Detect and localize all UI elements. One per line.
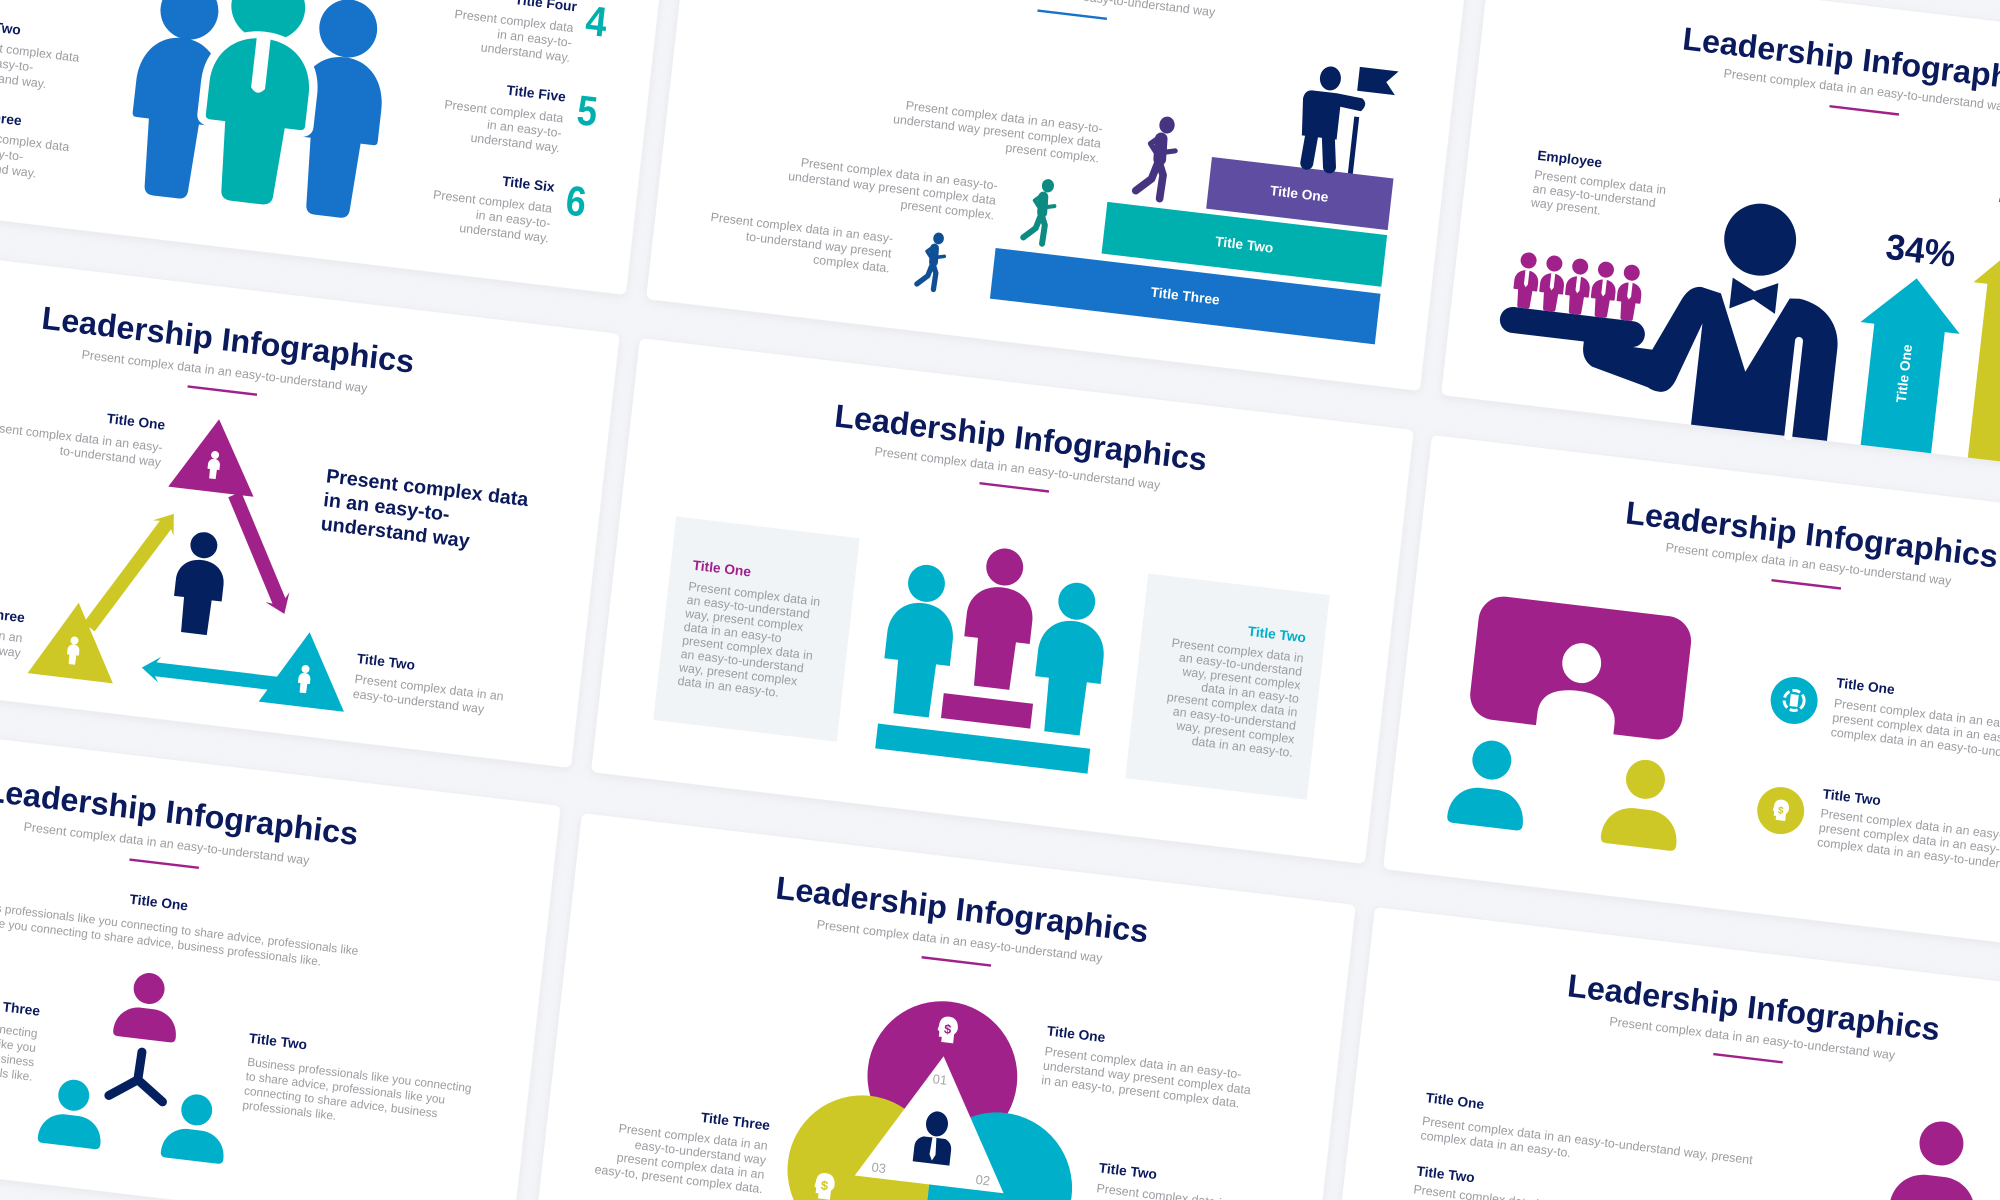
text: title two: Business professionals like you connecting xyxy=(247,1055,472,1095)
number 5 and text: title five: Title Five xyxy=(506,83,567,105)
card: title two: way, present complex xyxy=(1181,664,1302,693)
text: title two xyxy=(0,16,83,95)
card: title one: present complex data in xyxy=(682,633,814,663)
subtitle: Present complex data in an easy-to-understand way xyxy=(1665,540,1953,588)
step: title one xyxy=(1206,157,1394,230)
number 6 and text: title six: Title Six xyxy=(502,174,556,195)
text: title two: Title Two xyxy=(1416,1164,1475,1185)
text: title one: complex data in an easy-to. xyxy=(1420,1128,1572,1160)
panel: title list slide (bottom right) xyxy=(1326,907,2000,1200)
title: Leadership Infographics xyxy=(774,870,1150,950)
accent line xyxy=(1713,1053,1783,1064)
text: first description: understand way present complex data xyxy=(892,112,1102,151)
text: third description: to-understand way present xyxy=(745,229,893,261)
podium: base xyxy=(875,724,1090,774)
panel: waiter slide (top right) xyxy=(1441,0,2000,487)
text: title two: Title Two xyxy=(356,651,416,673)
card: title two: Present complex data in xyxy=(1171,636,1304,665)
text: title three: present complex data in an xyxy=(616,1150,765,1182)
text: title two xyxy=(1817,786,2000,883)
icon: person with flag xyxy=(1295,61,1399,178)
number 6 and text: title six xyxy=(429,161,589,249)
diagram: overlapping circles and triangle: 01 xyxy=(932,1071,948,1088)
diagram: overlapping circles and triangle: 02 xyxy=(975,1172,991,1189)
subtitle: Present complex data in an easy-to-understand way xyxy=(81,348,369,396)
card: title two: data in an easy-to. xyxy=(1191,734,1294,760)
podium: upper block xyxy=(941,693,1033,729)
text: title one: Title One xyxy=(1835,675,1896,697)
panel: hierarchy slide (bottom left) xyxy=(0,714,561,1200)
text: title one xyxy=(1041,1023,1256,1112)
step: title one: Title One xyxy=(1269,183,1330,205)
text: title three xyxy=(0,593,26,660)
card: title two: Title Two xyxy=(1247,624,1307,646)
text: title three: easy-to-understand way xyxy=(634,1138,768,1167)
text: title four xyxy=(450,0,578,65)
card: title two: present complex data in xyxy=(1166,690,1298,719)
card: title two: an easy-to-understand xyxy=(1178,650,1303,679)
text: title two xyxy=(1096,1160,1249,1200)
card: title one: Present complex data in xyxy=(688,579,821,609)
text: employee: an easy-to-understand xyxy=(1532,182,1657,210)
arrow: second bar xyxy=(1954,231,2000,468)
triangle: purple xyxy=(168,414,262,497)
title: Leadership Infographics xyxy=(1624,494,2000,575)
icon: businessperson xyxy=(913,1109,955,1166)
icon: teal runner xyxy=(1023,177,1057,245)
text: title two xyxy=(241,1031,475,1138)
text: title four: in an easy-to- xyxy=(497,27,573,50)
text: title one: Title One xyxy=(1046,1023,1106,1045)
card: title one: way, present complex xyxy=(684,606,805,634)
accent line xyxy=(129,858,199,869)
title: Leadership Infographics xyxy=(833,398,1209,478)
card: title two: way, present complex xyxy=(1175,718,1296,747)
accent line xyxy=(921,956,991,967)
icon: blue runner xyxy=(916,231,947,290)
step: title three: Title Three xyxy=(1150,285,1221,308)
panel: staircase slide (top centre) xyxy=(646,0,1469,391)
icon: connector xyxy=(109,1049,168,1102)
icon: leader xyxy=(959,545,1040,692)
text: title two: Present complex data in an xyxy=(354,672,504,704)
card: title two: an easy-to-understand xyxy=(1172,704,1297,733)
text: title one: Title One xyxy=(1425,1090,1485,1112)
panel: mentor slide (middle right) xyxy=(1383,435,2000,961)
icon: right team member xyxy=(1029,579,1112,737)
text: callout: in an easy-to- xyxy=(322,489,451,526)
title: Leadership Infographics xyxy=(1566,967,1942,1047)
accent line xyxy=(1037,9,1107,20)
number 5 and text: title five: Present complex data xyxy=(444,97,564,125)
text: employee: way present. xyxy=(1529,195,1602,218)
icon: right blue person xyxy=(160,1091,230,1164)
text: title one: Title One xyxy=(129,892,189,914)
accent line xyxy=(1771,579,1841,590)
text: title three: Present complex data in an xyxy=(618,1121,768,1153)
text: title one xyxy=(0,396,167,470)
text: title two xyxy=(352,651,507,718)
triangle: blue xyxy=(259,627,352,712)
text: title two: Title Two xyxy=(248,1031,308,1052)
text: callout: Present complex data xyxy=(325,465,529,511)
card: title one: an easy-to-understand xyxy=(686,593,811,621)
text: title two: professionals like. xyxy=(242,1098,337,1123)
arrow: title one xyxy=(1847,272,1965,455)
icon: centre person xyxy=(170,529,229,636)
icon: purple person xyxy=(113,969,183,1043)
text: title three: Title Three xyxy=(700,1110,771,1133)
number 5 and text: title five xyxy=(440,71,600,159)
text: title three xyxy=(0,105,72,184)
text: callout: understand way xyxy=(320,513,471,553)
subtitle: Present complex data in an easy-to-understand way xyxy=(23,820,311,868)
card: title one: data in an easy-to xyxy=(683,620,782,645)
arrow: purple xyxy=(223,490,296,619)
arrow: olive xyxy=(79,506,184,635)
text: title one xyxy=(1420,1090,1757,1182)
text: first description: present complex. xyxy=(1005,141,1100,166)
card: title two: data in an easy-to xyxy=(1201,680,1300,706)
text: employee: Employee xyxy=(1537,148,1603,171)
card: title one: way, present complex xyxy=(677,660,799,688)
text: title two: connecting to share advice, business xyxy=(243,1083,438,1120)
arrow: blue xyxy=(140,655,280,697)
accent line xyxy=(187,385,257,396)
subtitle: Present complex data in an easy-to-understand way xyxy=(816,917,1104,965)
text: title one: Present complex data in an easy-to- xyxy=(1044,1044,1242,1082)
number 6 and text: title six: 6 xyxy=(564,176,589,226)
accent line xyxy=(1829,105,1899,116)
icon: purple person xyxy=(1888,1116,1985,1200)
card: title one xyxy=(653,516,860,742)
triangle: olive xyxy=(28,598,121,683)
title: Leadership Infographics xyxy=(40,300,416,380)
text: title three: easy-to, present complex data. xyxy=(594,1162,764,1196)
diagram: overlapping circles and triangle: $ xyxy=(820,1178,830,1193)
icon: three team members xyxy=(124,0,395,221)
panel: slide with six team titles (top left) xyxy=(0,0,675,295)
text: second description: understand way present complex data xyxy=(788,169,997,208)
value 34%: 34% xyxy=(1884,226,1958,275)
diagram: overlapping circles and triangle: $ xyxy=(943,1021,953,1037)
diagram: overlapping circles and triangle: 03 xyxy=(871,1159,887,1176)
text: title three xyxy=(0,977,41,1084)
text: title two: Title Two xyxy=(1098,1160,1158,1182)
icon: olive badge: $ xyxy=(1777,805,1784,817)
text: title two: easy-to-understand way xyxy=(352,687,486,716)
step: title two xyxy=(1102,202,1387,287)
text: title one: Title One xyxy=(106,411,166,433)
icon: olive badge xyxy=(1755,784,1807,837)
text: first description: Present complex data in an easy-to- xyxy=(905,98,1103,136)
text: title two xyxy=(1413,1163,1747,1200)
step: title two: Title Two xyxy=(1214,234,1274,256)
number 5 and text: title five: understand way. xyxy=(470,131,561,155)
text: title one: in an easy-to, present complex data. xyxy=(1041,1073,1240,1111)
accent line xyxy=(979,482,1049,493)
text: third description: complex data. xyxy=(812,252,891,276)
panel: triangle cycle slide (middle left) xyxy=(0,242,620,768)
text: title four: understand way. xyxy=(480,40,571,65)
icon: leader screen xyxy=(1467,594,1694,746)
text: title two: Title Two xyxy=(1822,786,1882,808)
text: third description: Present complex data in an easy- xyxy=(710,210,894,246)
number 6 and text: title six: in an easy-to- xyxy=(475,208,551,231)
icon: olive person xyxy=(1600,756,1685,851)
number 5 and text: title five: 5 xyxy=(575,86,600,135)
text: title one xyxy=(0,871,362,973)
text: title two: to share advice, professionals like you xyxy=(245,1069,446,1107)
text: title three xyxy=(594,1098,772,1196)
card: title one: an easy-to-understand xyxy=(680,647,805,675)
arrow: title one: Title One xyxy=(1894,343,1915,404)
subtitle: Present complex data in an easy-to-understand way xyxy=(874,444,1162,492)
step: title three xyxy=(990,248,1381,344)
subtitle: Present complex data in an easy-to-understand way xyxy=(1609,1014,1897,1062)
text: second description: Present complex data in an easy-to- xyxy=(800,155,998,193)
text: title one xyxy=(1830,675,2000,773)
card: title one: data in an easy-to. xyxy=(677,674,780,700)
text: second description: present complex. xyxy=(900,197,995,223)
icon: staff on tray xyxy=(1511,251,1645,322)
number 6 and text: title six: understand way. xyxy=(459,221,550,245)
text: employee: Present complex data in xyxy=(1533,168,1667,197)
panel: podium slide (centre) xyxy=(591,338,1414,864)
number 6 and text: title six: Present complex data xyxy=(432,188,553,216)
icon: waiter xyxy=(1491,174,1852,441)
text: title four: Present complex data xyxy=(454,7,574,35)
icon: left team member xyxy=(878,561,961,719)
card: title one: Title One xyxy=(692,558,752,580)
icon: blue badge xyxy=(1768,674,1820,727)
panel: three circles slide (bottom centre) xyxy=(533,813,1356,1200)
card: title two xyxy=(1125,574,1330,800)
text: employee xyxy=(1529,148,1669,225)
icon: left blue person xyxy=(37,1076,107,1150)
diagram: overlapping circles and triangle xyxy=(788,1001,1072,1200)
text: title one: Present complex data in an easy-to-understand way, present xyxy=(1421,1114,1753,1167)
number 5 and text: title five: in an easy-to- xyxy=(486,118,562,140)
text: title one: understand way present complex data xyxy=(1042,1059,1252,1097)
icon: purple runner xyxy=(1135,114,1179,200)
icon: blue person xyxy=(1447,736,1532,831)
text: title one: to-understand way xyxy=(59,444,163,470)
